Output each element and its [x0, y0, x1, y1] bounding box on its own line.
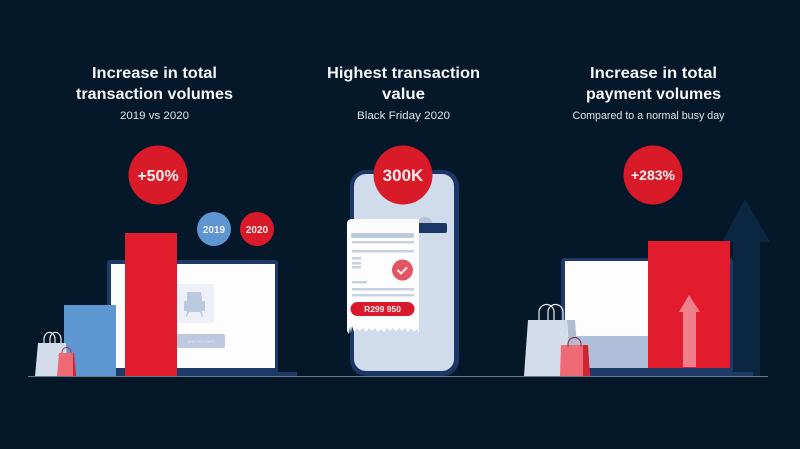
laptop with product page: [107, 260, 297, 376]
heading: highest transaction value: value: [382, 86, 425, 103]
legend: 2019: [197, 212, 231, 246]
amount pill: R299 950: [364, 304, 401, 314]
panel: total transaction volumes: [35, 65, 297, 376]
heading: payment volumes: [586, 65, 721, 103]
legend: 2020: [240, 212, 274, 246]
shopping bags: [524, 305, 590, 376]
heading: transaction volumes: Increase in total: [92, 65, 217, 82]
heading: highest transaction value: Highest transaction: [327, 65, 480, 82]
add to cart button: ADD TO CART: [188, 339, 215, 344]
receipt tab: [416, 217, 447, 233]
heading: payment volumes: payment volumes: [586, 86, 721, 103]
panel: total payment volumes: [524, 65, 770, 376]
legend: 2020: 2020: [246, 225, 269, 236]
product card: armchair: [176, 284, 214, 323]
icon: check mark: [392, 260, 413, 280]
bar: 2020: [125, 233, 177, 376]
shopping bags: [35, 332, 76, 376]
heading: highest transaction value: [327, 65, 480, 103]
subheading: compared to a normal busy day: Compared to a normal busy day: [572, 110, 725, 122]
bar: 2019: [64, 305, 116, 376]
badge: +50%: +50%: [137, 168, 179, 185]
subheading: 2019 vs 2020: 2019 vs 2020: [120, 110, 189, 122]
ground line: [28, 376, 768, 377]
legend: 2019: 2019: [203, 225, 226, 236]
subheading: Black Friday 2020: Black Friday 2020: [357, 110, 450, 122]
heading: payment volumes: Increase in total: [590, 65, 717, 82]
laptop: [561, 258, 753, 376]
bar with up arrow: [648, 241, 730, 368]
receipt: [347, 219, 419, 334]
icon: up arrow: [679, 295, 700, 367]
add to cart button: [177, 334, 225, 348]
badge: 300K: 300K: [383, 166, 424, 185]
background arrow: [722, 199, 770, 376]
badge: +50%: [128, 146, 188, 204]
heading: transaction volumes: [76, 65, 233, 103]
badge: +283%: [624, 146, 682, 204]
badge: +283%: +283%: [631, 167, 676, 183]
badge: 300K: [374, 146, 432, 204]
panel: highest transaction value: [327, 65, 480, 376]
phone: [350, 170, 459, 376]
heading: transaction volumes: transaction volumes: [76, 86, 233, 103]
